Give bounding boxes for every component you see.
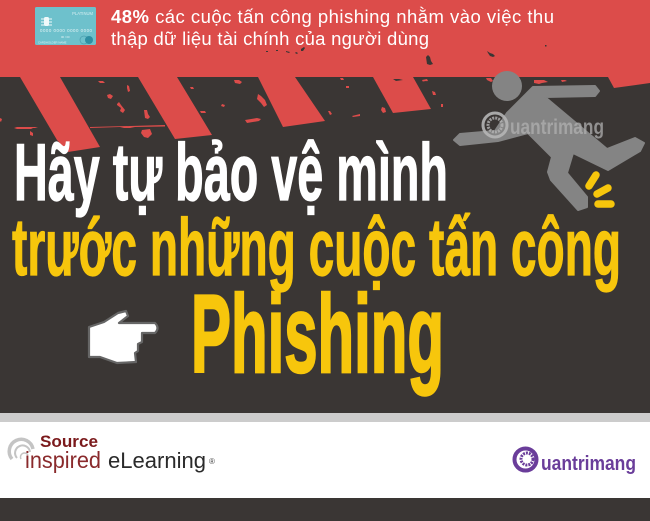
logo: Quantrimang: uantrimang xyxy=(541,453,636,475)
logo: Quantrimang xyxy=(514,448,636,475)
panel: footer band xyxy=(0,413,650,498)
icon: falling figure xyxy=(454,71,644,210)
watermark: quantrimang: uantrimang xyxy=(510,116,604,139)
text: phishing statistic: thập dữ liệu tài chính của người dùng xyxy=(111,28,429,49)
callout: credit card icon xyxy=(35,7,96,45)
watermark: quantrimang xyxy=(483,113,604,139)
callout: credit card icon: 00 / 00 xyxy=(61,35,70,39)
logo: Source inspired eLearning: ® xyxy=(209,457,215,466)
logo: Source inspired eLearning: Source xyxy=(40,433,98,451)
icon: pointing hand xyxy=(89,311,158,363)
title line 3: Phishing: Phishing xyxy=(191,273,444,396)
logo: Source inspired eLearning: inspired xyxy=(25,447,101,473)
callout: credit card icon: PLATINUM xyxy=(72,11,93,16)
callout: credit card icon: CARDHOLDER NAME xyxy=(38,40,67,44)
panel: red top band with hazard stripes xyxy=(0,0,650,152)
logo: Source inspired eLearning: eLearning xyxy=(108,448,206,473)
text: phishing statistic: 48% các cuộc tấn công phishing nhằm vào việc thu xyxy=(111,6,554,27)
distress specks on red band xyxy=(266,45,546,84)
callout: credit card icon: 0000 0000 0000 0000 xyxy=(40,28,93,33)
logo: Source inspired eLearning xyxy=(9,433,215,473)
text: phishing statistic xyxy=(111,6,554,49)
